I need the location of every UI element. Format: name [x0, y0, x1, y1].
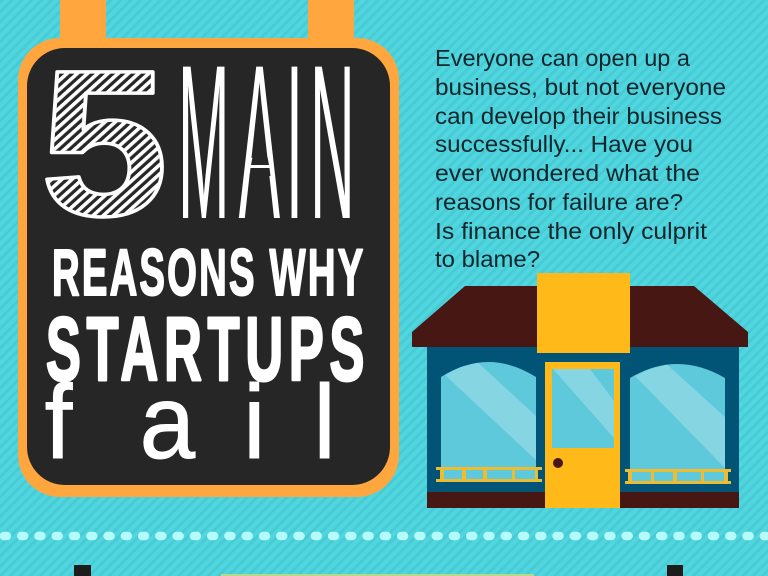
- store sign: [537, 273, 630, 353]
- dotted divider: [0, 532, 768, 540]
- right window rail: [625, 469, 731, 484]
- sign hanger left: [60, 0, 106, 45]
- title line REASONS WHY: REASONS WHY: [52, 236, 365, 310]
- title: [40, 21, 370, 481]
- store roof: [412, 286, 748, 347]
- title word STARTUPS: STARTUPS: [46, 298, 370, 400]
- title word MAIN: MAIN: [178, 21, 355, 266]
- sign frame: [18, 38, 399, 497]
- left window: [441, 362, 536, 480]
- intro paragraph: successfully... Have you: [435, 131, 693, 157]
- letter A crossbar thinning: [250, 157, 270, 176]
- left window rail: [436, 467, 542, 482]
- intro paragraph: reasons for failure are?: [435, 189, 683, 215]
- sign hanger right: [308, 0, 354, 45]
- sign board: [27, 48, 390, 485]
- next section: right post: [667, 565, 683, 576]
- intro paragraph: ever wondered what the: [435, 160, 700, 186]
- intro paragraph: Everyone can open up a: [435, 45, 691, 71]
- right window: [630, 364, 725, 482]
- next section: left post: [74, 565, 91, 576]
- store base: [427, 492, 739, 508]
- panel: chalkboard sign: [18, 0, 399, 497]
- intro paragraph: business, but not everyone: [435, 74, 726, 100]
- next section: panel top edge: [221, 574, 534, 576]
- title numeral 5: 5: [40, 27, 168, 259]
- title word fail: fail: [45, 363, 336, 481]
- intro paragraph: to blame?: [435, 246, 540, 272]
- store door: [545, 362, 620, 508]
- store wall: [427, 345, 739, 493]
- intro paragraph: Is finance the only culprit: [435, 218, 707, 244]
- intro paragraph: [435, 45, 726, 272]
- intro paragraph: can develop their business: [435, 103, 722, 129]
- icon: storefront: [412, 273, 748, 508]
